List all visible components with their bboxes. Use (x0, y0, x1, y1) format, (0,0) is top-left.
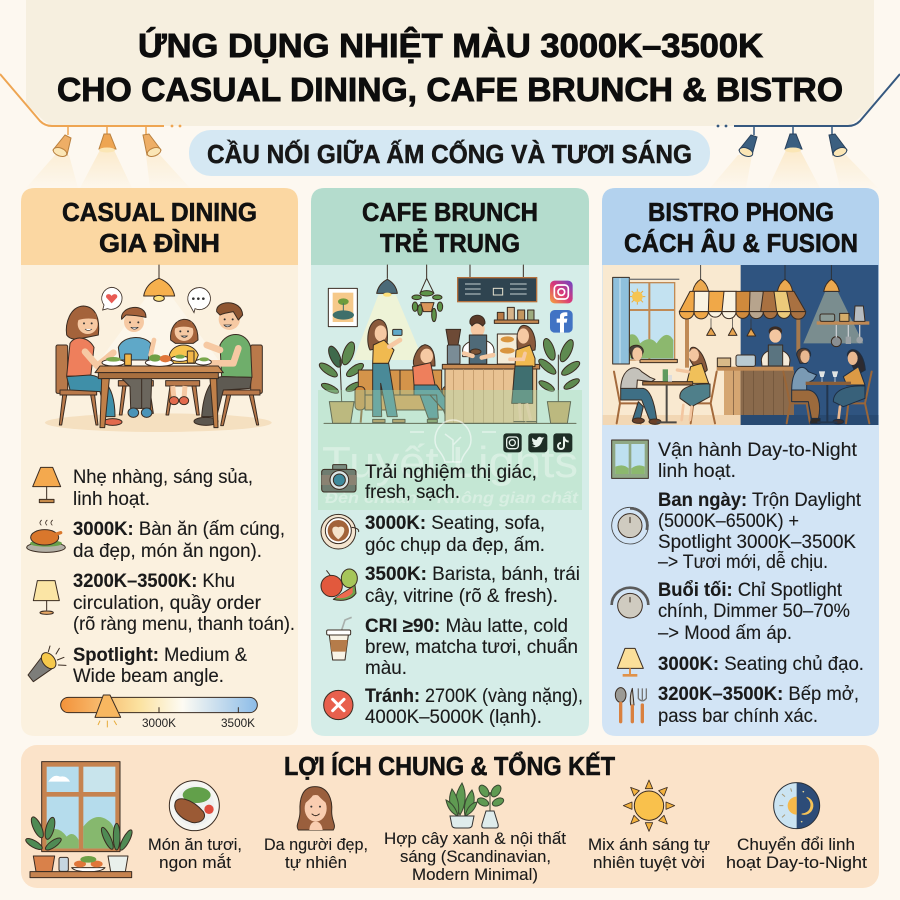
shelf with utensils (817, 321, 869, 325)
bar counter (724, 370, 741, 415)
heading: LỢI ÍCH CHUNG & TỔNG KẾT (284, 751, 615, 781)
icon: pale lamp (33, 581, 59, 614)
benefit: day to night: hoạt Day-to-Night (726, 854, 867, 872)
item: 3000K seating (365, 513, 545, 556)
day couple (614, 345, 717, 424)
wall art (328, 288, 357, 327)
panel: casual dining (21, 188, 298, 736)
icon: fruit (321, 569, 357, 600)
item: 3500K barista: cây, vitrine (rõ & fresh). (365, 586, 558, 607)
item: spotlight: Wide beam angle. (73, 666, 224, 687)
item: spotlight: Spotlight: Medium & (73, 645, 247, 666)
heading (624, 197, 858, 258)
benefit: plants and interior: sáng (Scandinavian, (400, 848, 551, 866)
color temperature scale: 3500K (221, 718, 255, 730)
panel: bistro (602, 188, 879, 736)
item: avoid: Tránh: 2700K (vàng nặng), (365, 686, 583, 707)
item: visual experience: Trải nghiệm thị giác, (365, 462, 537, 483)
item: 3200K-3500K (73, 571, 295, 635)
item: lamp note: linh hoạt. (73, 489, 150, 510)
barista (471, 321, 485, 337)
item: evening (658, 580, 850, 644)
item: day to night (658, 440, 858, 482)
item: 3200K bistro: pass bar chính xác. (658, 706, 818, 727)
customer (517, 325, 535, 353)
heading (62, 197, 257, 258)
speech bubbles (102, 287, 122, 310)
night couple (783, 348, 872, 424)
header band (602, 188, 879, 265)
standing woman (368, 319, 387, 350)
sitting woman (413, 345, 435, 366)
icon: window (612, 440, 648, 478)
icon: potted plants (446, 783, 505, 828)
item: 3200K bistro (658, 684, 859, 727)
shelf (494, 320, 539, 323)
item: daytime (658, 490, 862, 573)
icon: cutlery (615, 688, 646, 722)
barista (769, 326, 782, 336)
icon: camera (322, 465, 356, 492)
watermark: Đèn chuẩn – Không gian chất (325, 490, 579, 507)
item: 3000K: da đẹp, món ăn ngon). (73, 541, 262, 562)
panel background (311, 188, 589, 736)
illustration: window sill (24, 762, 134, 878)
subtitle pill (189, 130, 710, 176)
heading (362, 197, 538, 258)
heading: CÁCH ÂU & FUSION (624, 228, 858, 258)
color temperature scale (61, 695, 257, 730)
benefit: natural light: Mix ánh sáng tự (588, 836, 710, 854)
mini pendants (711, 318, 751, 328)
item: daytime: –> Tươi mới, dễ chịu. (658, 551, 828, 573)
icon: food plate (169, 781, 219, 831)
watermark: Tuyết Lights (322, 438, 578, 487)
benefit: plants and interior: Modern Minimal) (412, 866, 538, 884)
icon: day night (774, 783, 820, 829)
watermark (318, 390, 582, 510)
heading: CASUAL DINING (62, 197, 257, 227)
panel background (602, 188, 879, 736)
item: avoid (365, 686, 583, 728)
girl (171, 319, 198, 343)
benefit: day to night: Chuyển đổi linh (737, 836, 855, 854)
benefit: plants and interior: Hợp cây xanh & nội thất (384, 830, 566, 848)
heading: BISTRO PHONG (648, 197, 834, 227)
counter (445, 369, 537, 423)
item: evening: Buổi tối: Chỉ Spotlight (658, 580, 843, 601)
heading: GIA ĐÌNH (99, 228, 220, 258)
item: 3200K-3500K: (rõ ràng menu, thanh toán). (73, 614, 295, 635)
item: CRI: màu. (365, 658, 407, 679)
social icons row (503, 433, 572, 452)
icon: woman face (297, 787, 334, 830)
icon: sun (623, 780, 675, 831)
item: lamp note (73, 467, 253, 510)
item: 3000K bistro: 3000K: Seating chủ đạo. (658, 654, 864, 675)
cool track lights (710, 126, 878, 188)
header banner (0, 0, 900, 127)
icon: latte (321, 514, 359, 549)
item: 3500K barista (365, 564, 580, 607)
item: avoid: 4000K–5000K (lạnh). (365, 707, 542, 728)
item: 3000K seating: 3000K: Seating, sofa, (365, 513, 545, 534)
benefit: natural light (588, 836, 710, 872)
item: 3500K barista: 3500K: Barista, bánh, trái (365, 564, 580, 585)
item: evening: –> Mood ấm áp. (658, 623, 792, 644)
illustration: day to night bistro (603, 265, 878, 425)
item: daytime: Ban ngày: Trộn Daylight (658, 490, 862, 511)
heading: TRẺ TRUNG (380, 228, 520, 258)
title: CHO CASUAL DINING, CAFE BRUNCH & BISTRO (57, 71, 843, 108)
illustration: family at dinner table (45, 265, 272, 432)
menu board (470, 265, 523, 277)
item: day to night: linh hoạt. (658, 461, 736, 482)
item: lamp note: Nhẹ nhàng, sáng sủa, (73, 467, 253, 488)
sofa (358, 370, 442, 400)
item: evening: chính, Dimmer 50–70% (658, 601, 850, 622)
color temperature scale: 3000K (142, 718, 176, 730)
item: spotlight (73, 645, 247, 687)
benefit: food: Món ăn tươi, (148, 836, 242, 854)
benefit: food: ngon mắt (159, 853, 231, 872)
item: 3200K bistro: 3200K–3500K: Bếp mở, (658, 684, 859, 705)
panel background (21, 745, 879, 888)
father (219, 309, 240, 330)
icon: table lamp (33, 467, 61, 503)
icon: iced coffee (327, 617, 352, 660)
icon: spotlight (28, 646, 66, 682)
illustration: cafe scene (317, 265, 582, 423)
display (497, 334, 517, 364)
title (57, 27, 843, 108)
benefit: skin (264, 836, 368, 872)
warm track lights (26, 126, 190, 188)
night cone (803, 292, 863, 343)
social icons (550, 281, 573, 303)
icon: warm lamp (617, 648, 643, 677)
header band (311, 188, 589, 265)
item: visual experience: fresh, sạch. (365, 482, 460, 503)
item: day to night: Vận hành Day-to-Night (658, 440, 858, 461)
heading: CAFE BRUNCH (362, 197, 538, 227)
item: daytime: Spotlight 3000K–3500K (658, 532, 856, 553)
item: 3000K (73, 519, 285, 562)
boy (124, 312, 144, 332)
header band (21, 188, 298, 265)
icon: daytime dimmer (612, 507, 648, 544)
icon: avoid cross (324, 690, 353, 720)
mother (66, 306, 99, 339)
day pendant (701, 265, 831, 280)
panel: cafe brunch (311, 188, 589, 736)
item: CRI (365, 616, 578, 679)
icon: roast chicken (27, 520, 65, 552)
grinder (446, 329, 461, 345)
benefit: skin: Da người đẹp, (264, 836, 368, 854)
benefit: natural light: nhiên tuyệt vời (593, 854, 705, 872)
window (629, 283, 675, 360)
icon: evening dimmer (612, 588, 648, 618)
benefit: day to night (726, 836, 867, 872)
subtitle pill: CẦU NỐI GIỮA ẤM CỐNG VÀ TƯƠI SÁNG (207, 139, 692, 169)
item: 3200K-3500K: 3200K–3500K: Khu (73, 571, 235, 592)
item: 3200K-3500K: circulation, quầy order (73, 593, 262, 614)
item: 3000K: 3000K: Bàn ăn (ấm cúng, (73, 519, 285, 540)
benefit: plants and interior (384, 830, 566, 884)
item: 3000K seating: góc chụp da đẹp, ấm. (365, 535, 545, 556)
benefit: skin: tự nhiên (285, 854, 347, 872)
panel background (21, 188, 298, 736)
item: CRI: CRI ≥90: Màu latte, cold (365, 616, 568, 637)
poles (685, 319, 689, 368)
table (95, 366, 223, 373)
food on table (102, 359, 125, 366)
awning (679, 291, 806, 319)
plants (317, 337, 582, 395)
item: CRI: brew, matcha tươi, chuẩn (365, 637, 578, 658)
item: visual experience (365, 462, 537, 503)
item: daytime: (5000K–6500K) + (658, 511, 799, 532)
benefit: food (148, 836, 242, 872)
panel: common benefits (21, 745, 879, 888)
title: ỨNG DỤNG NHIỆT MÀU 3000K–3500K (138, 27, 763, 64)
